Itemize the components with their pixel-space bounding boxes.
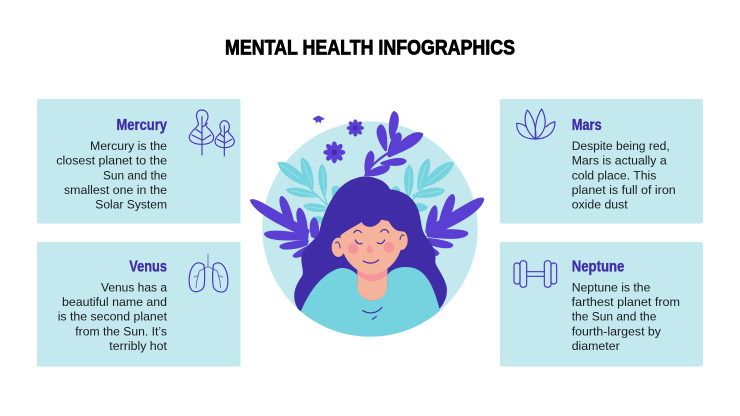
title: MENTAL HEALTH INFOGRAPHICS bbox=[225, 36, 515, 60]
flower large bbox=[323, 141, 345, 163]
background circle bbox=[262, 121, 478, 337]
illustration: woman with plants bbox=[251, 112, 483, 340]
text block: Mars: Despite being red, bbox=[572, 139, 670, 153]
icon: lotus bbox=[517, 109, 555, 139]
text block: Mercury: Solar System bbox=[95, 198, 167, 212]
text block: Mars: oxide dust bbox=[572, 198, 628, 212]
text block: Mars: Mars is actually a bbox=[572, 154, 667, 168]
heading: Mercury: Mercury bbox=[116, 117, 167, 134]
heading: Venus: Venus bbox=[129, 258, 167, 275]
text block: Neptune: Neptune is the bbox=[572, 280, 651, 294]
text block: Mars: cold place. This bbox=[572, 168, 656, 182]
face bbox=[341, 219, 403, 275]
text block: Venus: terribly hot bbox=[109, 339, 168, 353]
icon: dumbbell bbox=[514, 261, 557, 287]
cheeks bbox=[348, 243, 359, 254]
right branch bbox=[427, 199, 483, 235]
text block: Mercury: closest planet to the bbox=[56, 154, 167, 168]
eyes, brows and mouth bbox=[354, 230, 389, 263]
bangs bbox=[340, 219, 404, 236]
light leaves bbox=[279, 159, 453, 223]
text block: Neptune bbox=[572, 280, 680, 353]
text block: Neptune: fourth-largest by bbox=[572, 324, 662, 338]
text block: Mercury: Sun and the bbox=[103, 168, 167, 182]
panel: Neptune bbox=[500, 242, 703, 366]
flower tiny bbox=[313, 115, 325, 123]
heading: Neptune: Neptune bbox=[572, 258, 625, 275]
panel: Mars bbox=[500, 99, 703, 224]
panel: Venus bbox=[37, 242, 240, 366]
neck bbox=[357, 268, 388, 301]
ear lines bbox=[335, 235, 404, 248]
top branch bbox=[365, 148, 397, 176]
icon: lungs bbox=[189, 254, 228, 292]
icon: trees bbox=[189, 110, 234, 156]
text block: Mars: planet is full of iron bbox=[572, 183, 676, 197]
text block: Mars bbox=[572, 139, 676, 212]
text block: Venus: beautiful name and bbox=[62, 295, 167, 309]
text block: Mercury: smallest one in the bbox=[64, 183, 167, 197]
figure bbox=[294, 176, 447, 340]
text block: Mercury bbox=[56, 139, 167, 212]
text block: Venus: from the Sun. It’s bbox=[75, 324, 167, 338]
text block: Venus bbox=[58, 280, 168, 353]
flower small bbox=[347, 119, 364, 137]
left branch bbox=[251, 200, 308, 236]
neck shadow bbox=[357, 268, 387, 281]
purple leaves bbox=[251, 112, 483, 257]
shirt bbox=[300, 267, 441, 340]
ears bbox=[332, 231, 408, 257]
nose bbox=[367, 244, 373, 253]
text block: Venus: is the second planet bbox=[58, 310, 168, 324]
heading: Mars: Mars bbox=[572, 117, 602, 134]
text block: Venus: Venus has a bbox=[101, 280, 167, 294]
shirt wrinkles bbox=[363, 307, 382, 319]
text block: Neptune: diameter bbox=[572, 339, 620, 353]
text block: Neptune: the Sun and the bbox=[572, 310, 657, 324]
hair bbox=[294, 176, 447, 312]
text block: Mercury: Mercury is the bbox=[90, 139, 167, 153]
panel: Mercury bbox=[37, 99, 240, 224]
text block: Neptune: farthest planet from bbox=[572, 295, 680, 309]
